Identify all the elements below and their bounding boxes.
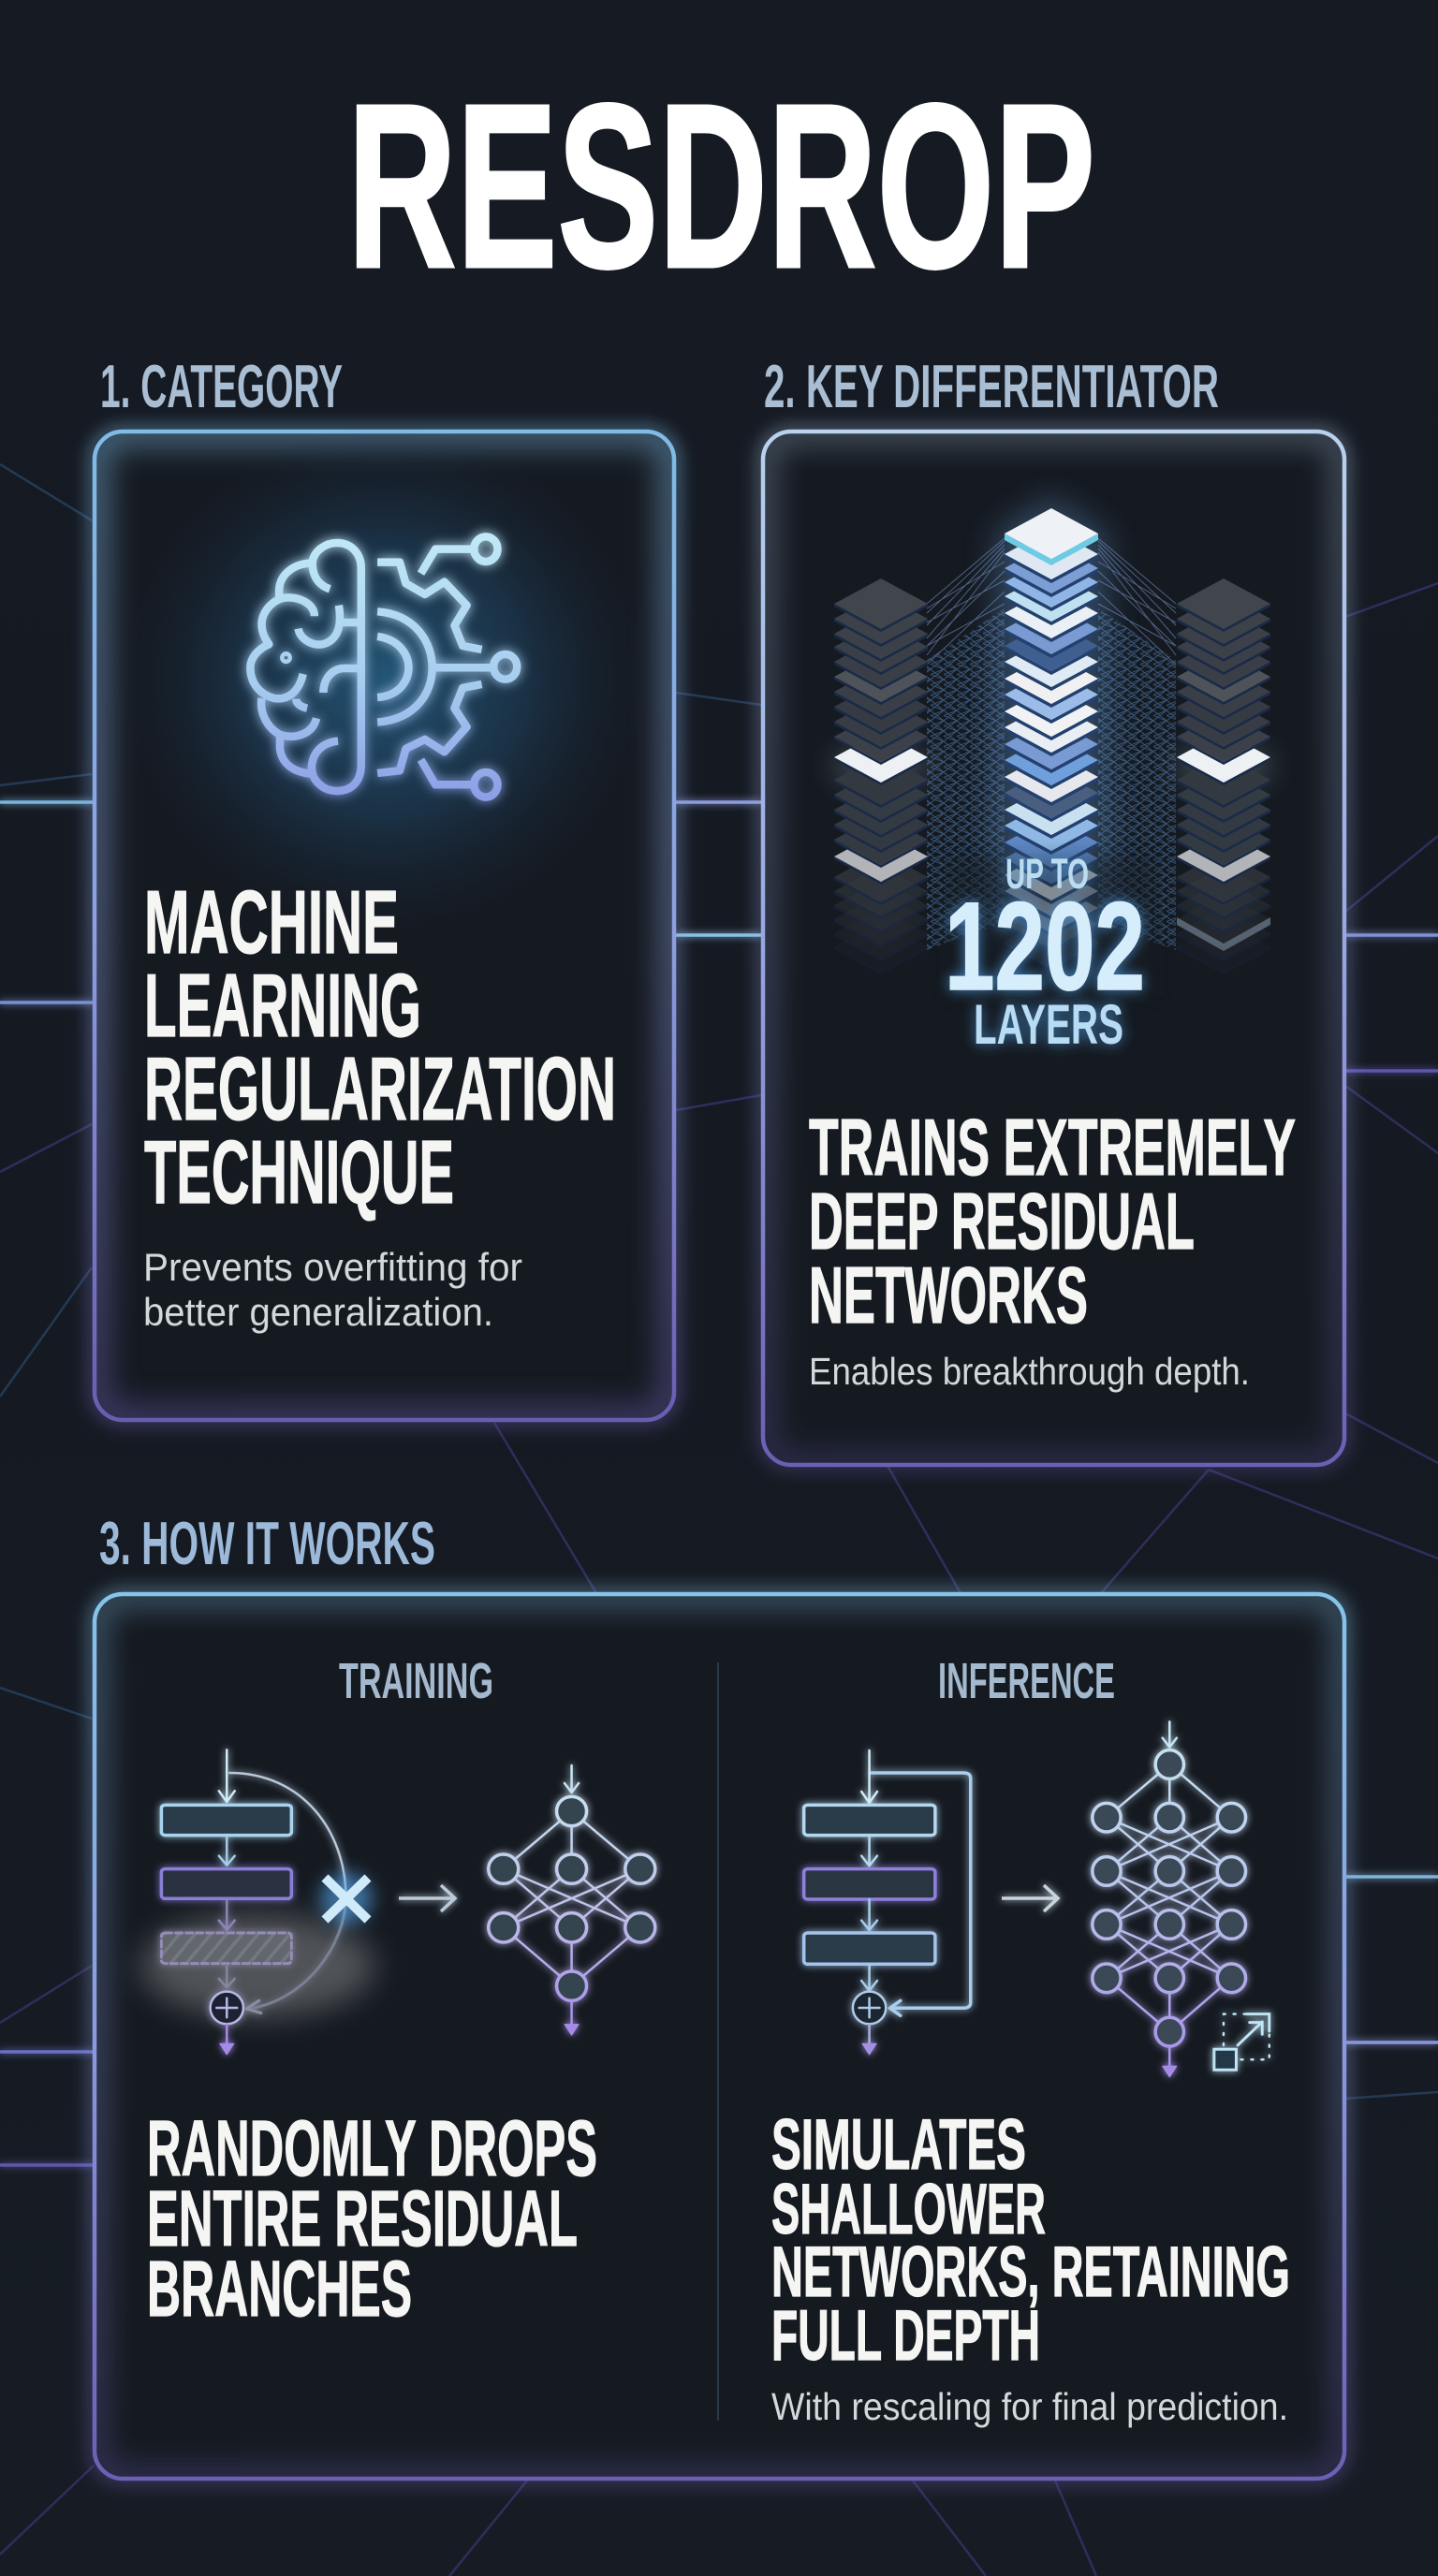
- network diagram: training: [489, 1765, 655, 2035]
- heading: trains extremely deep residual networks: NETWORKS: [809, 1251, 1088, 1340]
- network diagram: inference: [1093, 1721, 1246, 2077]
- counter: up to 1202 layers: [945, 850, 1145, 1056]
- description: category: Prevents overfitting for: [143, 1245, 522, 1289]
- heading: randomly drops entire residual branches: ENTIRE RESIDUAL: [147, 2174, 578, 2262]
- heading: machine learning regularization technique: TECHNIQUE: [144, 1122, 454, 1222]
- panel: how it works: [95, 1594, 1344, 2479]
- residual block diagram: training: [161, 1749, 345, 2055]
- arrow: inference to network: [1002, 1885, 1058, 1911]
- heading: simulates shallower networks, retaining full depth: SIMULATES: [771, 2105, 1026, 2185]
- right stack: [1177, 578, 1270, 974]
- heading: 3. how it works: 3. HOW IT WORKS: [99, 1509, 435, 1577]
- dropped block glow: [140, 1914, 374, 2017]
- training column: [140, 1653, 655, 2333]
- heading: trains extremely deep residual networks: [809, 1104, 1296, 1340]
- heading: simulates shallower networks, retaining full depth: [771, 2105, 1290, 2376]
- panel: category: [95, 426, 674, 1420]
- heading: trains extremely deep residual networks: DEEP RESIDUAL: [809, 1178, 1195, 1266]
- network connections between stacks: [927, 538, 1176, 950]
- icon: brain and gear circuit: [250, 536, 517, 798]
- inference column: [771, 1653, 1290, 2428]
- heading: machine learning regularization technique: [144, 872, 616, 1222]
- description: category: [143, 1245, 522, 1334]
- heading: simulates shallower networks, retaining full depth: FULL DEPTH: [771, 2296, 1040, 2376]
- icon: rescale: [1214, 2014, 1269, 2070]
- counter: up to 1202 layers: UP TO: [1005, 850, 1089, 898]
- label: training: TRAINING: [339, 1653, 493, 1709]
- heading: machine learning regularization technique: REGULARIZATION: [144, 1039, 616, 1139]
- heading: machine learning regularization technique: MACHINE: [144, 872, 399, 973]
- heading: randomly drops entire residual branches: [147, 2104, 597, 2333]
- counter: up to 1202 layers: 1202: [945, 877, 1145, 1017]
- glow behind highlighted layers: [838, 496, 1267, 936]
- center stack: [1005, 508, 1098, 970]
- label: inference: INFERENCE: [938, 1653, 1115, 1709]
- heading: machine learning regularization technique: LEARNING: [144, 956, 421, 1056]
- description: inference: With rescaling for final prediction.: [771, 2385, 1288, 2428]
- residual block diagram: inference: [804, 1750, 971, 2055]
- description: key differentiator: Enables breakthrough depth.: [809, 1350, 1250, 1393]
- heading: simulates shallower networks, retaining full depth: SHALLOWER: [771, 2170, 1046, 2249]
- left stack: [834, 578, 928, 974]
- heading: randomly drops entire residual branches: RANDOMLY DROPS: [147, 2104, 597, 2192]
- fade under counter: [946, 856, 1157, 997]
- layer stacks visual: [834, 496, 1270, 997]
- heading: 1. category: 1. CATEGORY: [100, 352, 343, 420]
- right stack lit layer: [1177, 917, 1270, 951]
- panel: key differentiator: [763, 432, 1344, 1465]
- icon: dropped path cross: [320, 1872, 373, 1925]
- description: category: better generalization.: [143, 1290, 493, 1334]
- brain glow: [122, 426, 646, 931]
- counter: up to 1202 layers: LAYERS: [974, 993, 1123, 1056]
- arrow: training to network: [399, 1885, 455, 1911]
- heading: randomly drops entire residual branches: BRANCHES: [147, 2245, 412, 2333]
